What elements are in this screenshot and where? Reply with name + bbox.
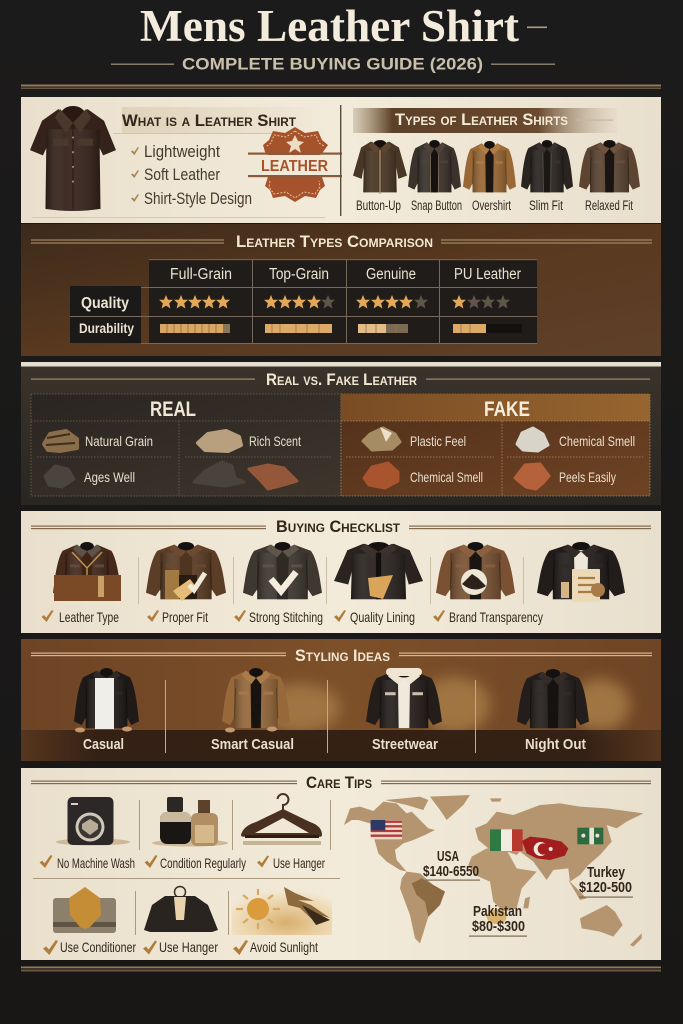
price: usa [423,848,480,881]
column: real [31,394,341,496]
row labels: Quality [81,295,129,312]
column headers [170,266,521,283]
price: pakistan: $80-$300 [472,918,525,935]
sample: peels easily [515,464,616,489]
column headers: PU Leather [454,266,521,283]
tip: avoid sunlight [232,886,332,955]
sample: chemical smell: Chemical Smell [559,433,635,449]
look: streetwear [366,668,442,753]
heading: leather types comparison: Leather Types Comparison [236,233,433,251]
panel: buying checklist [21,511,661,633]
item: certificate jacket [537,542,625,602]
subtitle: COMPLETE BUYING GUIDE (2026) [182,54,483,74]
flag: italy [490,829,523,851]
feature list: Soft Leather [144,166,220,184]
flag: turkey [522,837,568,860]
tip: use conditioner: Use Conditioner [60,939,136,955]
tip: condition regularly: Condition Regularly [160,855,246,871]
icon: short sleeve leather shirt [30,106,116,211]
heading: types of leather shirts [353,108,617,133]
quality stars [159,295,510,308]
panel: real vs fake leather [21,362,661,505]
price: pakistan [469,903,527,937]
heading: styling ideas: Styling Ideas [295,647,390,665]
flag: pakistan [577,828,603,844]
price: usa: $140-6550 [423,863,479,880]
column: fake: FAKE [484,398,530,421]
sample: plastic feel: Plastic Feel [410,433,466,449]
tip: no machine wash: No Machine Wash [57,855,135,871]
price: turkey [579,864,633,898]
heading: real vs fake leather: Real vs. Fake Leather [266,371,417,389]
sample: natural grain: Natural Grain [85,433,153,449]
column: fake [341,394,650,496]
panel: leather types comparison [21,224,661,356]
price: turkey: $120-500 [579,879,632,896]
sample: chemical smell rust: Chemical Smell [410,469,483,485]
item: brand transparency: Brand Transparency [449,609,543,625]
sample: rich scent: Rich Scent [249,433,301,449]
price: turkey: Turkey [587,864,626,881]
item: strong stitching: Strong Stitching [249,609,323,625]
shirt: relaxed fit: Relaxed Fit [585,198,633,213]
column headers: Full-Grain [170,266,232,283]
heading: what is a leather shirt: What is a Leather Shirt [122,111,297,130]
look: smart casual [211,668,294,753]
comparison table [70,259,537,344]
sample: natural grain [44,431,153,451]
feature list: Lightweight [144,143,220,161]
shirt: button-up [353,140,407,213]
sample: rich scent [198,431,301,451]
tip: avoid sunlight: Avoid Sunlight [250,939,318,955]
shirt: snap button: Snap Button [411,198,462,213]
heading: what is a leather shirt [113,107,312,134]
item: quality lining [334,542,423,625]
item: leather type: Leather Type [59,609,119,625]
tip: use hanger: Use Hanger [273,855,325,871]
world map with prices [344,795,643,947]
item: strong stitching [234,542,323,625]
shirt: overshirt [463,141,516,213]
column: real: REAL [150,398,196,421]
title: Mens Leather Shirt [140,1,519,51]
shirt: button-up: Button-Up [356,198,401,213]
panel: what is a leather shirt and types [21,97,661,223]
tip: use conditioner [43,887,136,955]
heading: buying checklist: Buying Checklist [276,518,401,536]
row labels: Durability [79,321,134,336]
icon: leather badge [248,127,342,202]
sample: dark and rust leather pieces [194,462,297,489]
item: proper fit: Proper Fit [162,609,208,625]
feature list [131,143,252,208]
icon: leather badge: LEATHER [261,158,328,175]
look: night out: Night Out [525,736,586,753]
sample: plastic feel [363,427,466,450]
column headers: Genuine [366,266,416,283]
feature list: Shirt-Style Design [144,190,252,208]
sample: chemical smell rust [364,463,483,488]
row labels [70,286,149,343]
panel: styling ideas [21,639,661,761]
heading: types of leather shirts: Types of Leather Shirts [395,110,568,129]
durability bars [160,324,522,333]
sample: peels easily: Peels Easily [559,469,616,485]
item: leather type [42,542,121,625]
look: smart casual: Smart Casual [211,736,294,753]
tip: use hanger jacket: Use Hanger [159,939,218,955]
price: pakistan: Pakistan [473,903,522,920]
sample: ages well: Ages Well [84,469,135,485]
shirt: slim fit [521,140,573,213]
shirt: relaxed fit [579,140,640,213]
look: night out [517,669,589,753]
shirt: snap button [408,140,462,213]
look: casual [74,668,139,753]
shirt: overshirt: Overshirt [472,198,511,213]
tip: use hanger jacket [143,886,218,955]
item: quality lining: Quality Lining [350,609,415,625]
column headers: Top-Grain [269,266,329,283]
tip: no machine wash [40,797,135,871]
tip: condition regularly [144,797,246,871]
price: usa: USA [437,848,459,865]
sample: chemical smell [517,428,635,451]
item: proper fit [146,542,226,625]
look: casual: Casual [83,736,124,753]
item: brand transparency [433,542,543,625]
tip: use hanger [241,794,325,871]
look: streetwear: Streetwear [372,736,438,753]
panel: care tips [21,768,661,960]
shirt: slim fit: Slim Fit [529,198,563,213]
flag: usa [371,820,402,839]
sample: ages well [45,466,135,487]
heading: care tips: Care Tips [306,774,372,792]
